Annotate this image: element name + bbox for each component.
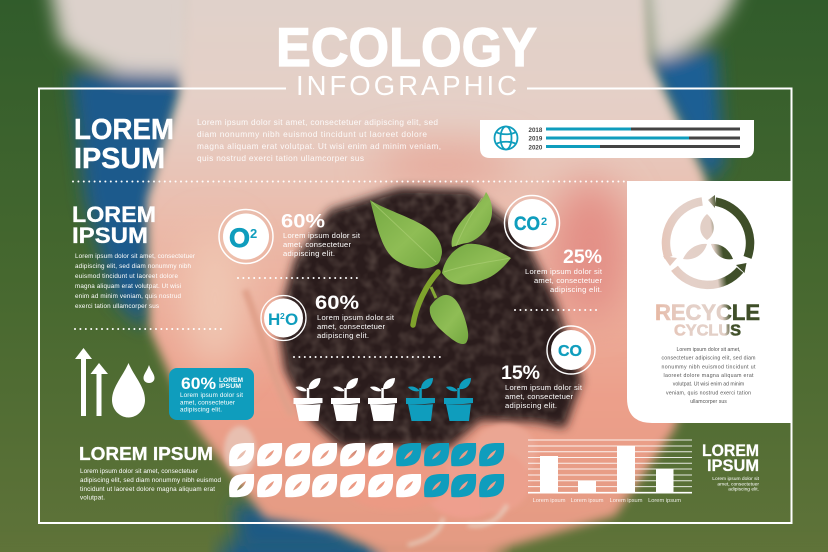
bottom left paragraph: tincidunt ut laoreet dolore magna aliquam erat [80, 486, 215, 493]
chart axis labels: Lorem ipsum [533, 498, 566, 504]
heading: lorem ipsum left column [72, 202, 156, 248]
left column paragraph: adipiscing elit, sed diam nonummy nibh [75, 263, 191, 270]
icon: CO2 badge [504, 196, 560, 250]
leaves row one [229, 443, 504, 466]
intro paragraph: Lorem ipsum dolor sit amet, consectetuer adipiscing elit, sed [197, 117, 438, 127]
icon: H2O badge: 2 [280, 311, 285, 321]
heading: lorem ipsum top left [74, 114, 174, 175]
year labels [528, 127, 543, 152]
icon: CO badge: CO [558, 343, 582, 360]
icon: H2O badge: O [285, 310, 298, 329]
stat: O2 60%: Lorem ipsum dolor sit [283, 231, 361, 240]
bottom left paragraph: volutpat. [80, 494, 105, 502]
recycle paragraph: volutpat. Ut wisi enim ad minim [673, 382, 744, 388]
recycle paragraph [662, 347, 756, 405]
heading: lorem ipsum left column: LOREM [72, 202, 156, 227]
icon: O2 badge: O [229, 223, 250, 253]
outer frame [39, 88, 792, 523]
bottom right paragraph: Lorem ipsum dolor sit [712, 476, 760, 482]
recycle paragraph: ullamcorper sus [690, 399, 727, 405]
stat: H2O 60%: Lorem ipsum dolor sit [317, 313, 395, 322]
recycle paragraph: consectetuer adipiscing elit, sed diam [662, 356, 756, 362]
bottom left paragraph: adipiscing elit, sed diam nonummy nibh euismod [80, 477, 221, 484]
left column paragraph: Lorem ipsum dolor sit amet, consectetuer [75, 253, 195, 260]
panel: recycle [627, 181, 792, 423]
icon: CO2 badge: 2 [541, 216, 547, 228]
stat: H2O 60%: 60% [315, 292, 359, 314]
leaves row two [229, 474, 504, 497]
card: yearly progress bars [480, 120, 754, 158]
heading: lorem ipsum bottom right: LOREM [702, 441, 759, 460]
left column paragraph: euismod tincidunt ut laoreet dolore [75, 273, 178, 280]
callout: teal 60% box: adipiscing elit. [180, 406, 222, 414]
stat: CO 15%: amet, consectetuer [505, 392, 573, 401]
recycle paragraph: laoreet dolore magna aliquam erat [664, 373, 754, 379]
callout: teal 60% box: amet, consectetuer [180, 400, 235, 406]
heading: lorem ipsum bottom right [702, 441, 759, 475]
pictogram: potted seedlings [294, 378, 473, 421]
icon: water drops [112, 363, 154, 418]
stat: CO2 25%: adipiscing elit. [550, 285, 602, 294]
year labels: 2020 [528, 144, 543, 152]
left column paragraph: magna aliquam erat volutpat. Ut wisi [75, 283, 181, 290]
stat: H2O 60%: amet, consectetuer [317, 322, 385, 331]
seedling plant [370, 192, 511, 344]
recycle paragraph: Lorem ipsum dolor sit amet, [676, 347, 741, 353]
chart axis labels: Lorem ipsum [648, 498, 681, 504]
intro paragraph: magna aliquam erat volutpat. Ut wisi enim ad minim veniam, [197, 141, 441, 151]
stat: CO2 25% [525, 246, 603, 294]
left column paragraph: exerci tation ullamcorper sus [75, 303, 159, 310]
chart axis labels: Lorem ipsum [610, 498, 643, 504]
callout: teal 60% box: LOREM [219, 377, 243, 384]
recycle heading: CYCLUS [674, 322, 741, 340]
heading: lorem ipsum top left: IPSUM [74, 143, 165, 175]
icon: H2O badge: H [268, 310, 280, 329]
stat: CO 15%: Lorem ipsum dolor sit [505, 383, 583, 392]
heading: lorem ipsum left column: IPSUM [72, 223, 148, 248]
intro paragraph [197, 117, 441, 163]
pictogram: leaf grid [229, 443, 504, 497]
bottom left paragraph: Lorem ipsum dolor sit amet, consectetuer [80, 468, 198, 475]
recycle heading [655, 300, 760, 340]
heading: lorem ipsum top left: LOREM [74, 114, 174, 146]
icon: recycle loop [663, 195, 750, 285]
chart axis labels: Lorem ipsum [571, 498, 604, 504]
recycle paragraph: nonummy nibh euismod tincidunt ut [662, 364, 756, 370]
bars [546, 128, 740, 148]
icon: globe [494, 126, 518, 150]
left column paragraph: enim ad minim veniam, quis nostrud [75, 293, 181, 300]
icon: CO2 badge: CO [514, 213, 540, 235]
icon: O2 badge: 2 [250, 226, 257, 241]
dotted dividers [73, 182, 626, 357]
bottom right paragraph: adipiscing elit. [728, 486, 759, 492]
stat: CO2 25%: 25% [563, 246, 602, 268]
stat: O2 60%: amet, consectetuer [283, 240, 351, 249]
bottom left paragraph [80, 468, 221, 502]
title: INFOGRAPHIC [296, 70, 517, 101]
stat: CO 15% [501, 362, 583, 410]
intro paragraph: diam nonummy nibh euismod tincidunt ut laoreet dolore [197, 129, 427, 139]
stat: CO 15%: 15% [501, 362, 540, 384]
callout: teal 60% box: IPSUM [219, 383, 241, 390]
icon: CO badge [547, 326, 595, 374]
stat: CO2 25%: amet, consectetuer [534, 276, 602, 285]
title: ECOLOGY [276, 16, 537, 78]
chart axis labels [533, 498, 681, 504]
stat: CO2 25%: Lorem ipsum dolor sit [525, 267, 603, 276]
heading: lorem ipsum bottom left: LOREM IPSUM [79, 443, 213, 464]
recycle paragraph: veniam, quis nostrud exerci tation [666, 390, 751, 396]
stat: O2 60%: adipiscing elit. [283, 249, 335, 258]
bottom right paragraph [712, 476, 760, 492]
stat: O2 60% [281, 210, 361, 258]
soil [275, 185, 585, 450]
icon: O2 badge [219, 210, 273, 264]
stat: H2O 60% [315, 292, 395, 340]
icon: H2O badge [261, 296, 306, 340]
fingers and palm creases [224, 290, 537, 545]
heading: lorem ipsum bottom right: IPSUM [707, 456, 759, 475]
stat: H2O 60%: adipiscing elit. [317, 331, 369, 340]
callout: teal 60% box: 60% [181, 374, 216, 393]
icon: rising arrows [75, 348, 108, 416]
bar chart [528, 440, 692, 504]
year labels: 2018 [528, 127, 543, 134]
callout: teal 60% box [169, 368, 254, 420]
recycle heading: RECYCLE [655, 300, 760, 325]
bottom right paragraph: amet, consectetuer [717, 482, 759, 488]
left column paragraph [75, 253, 195, 310]
callout: teal 60% box: Lorem ipsum dolor sit [180, 392, 243, 399]
stat: O2 60%: 60% [281, 210, 325, 232]
intro paragraph: quis nostrud exerci tation ullamcorper sus [197, 153, 364, 163]
year labels: 2019 [528, 136, 543, 142]
stat: CO 15%: adipiscing elit. [505, 401, 557, 410]
